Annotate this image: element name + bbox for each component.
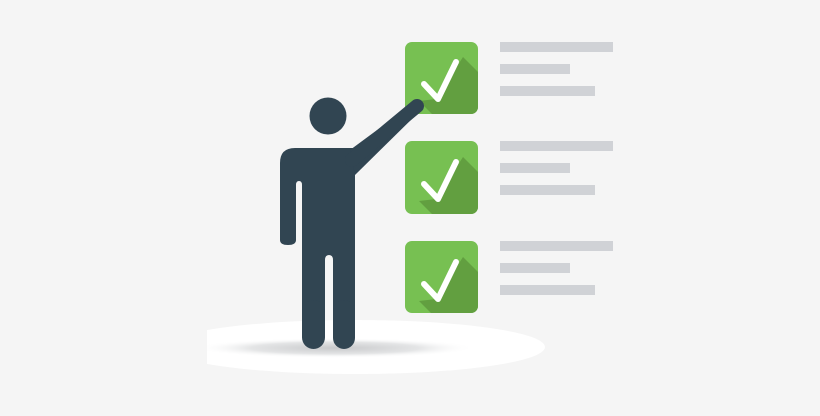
person: [280, 98, 422, 349]
checkbox 3: [405, 241, 478, 313]
checkbox 2: [405, 141, 478, 214]
checkbox 1: [405, 42, 478, 114]
text lines: [500, 42, 613, 295]
floor ellipse: [207, 320, 545, 374]
